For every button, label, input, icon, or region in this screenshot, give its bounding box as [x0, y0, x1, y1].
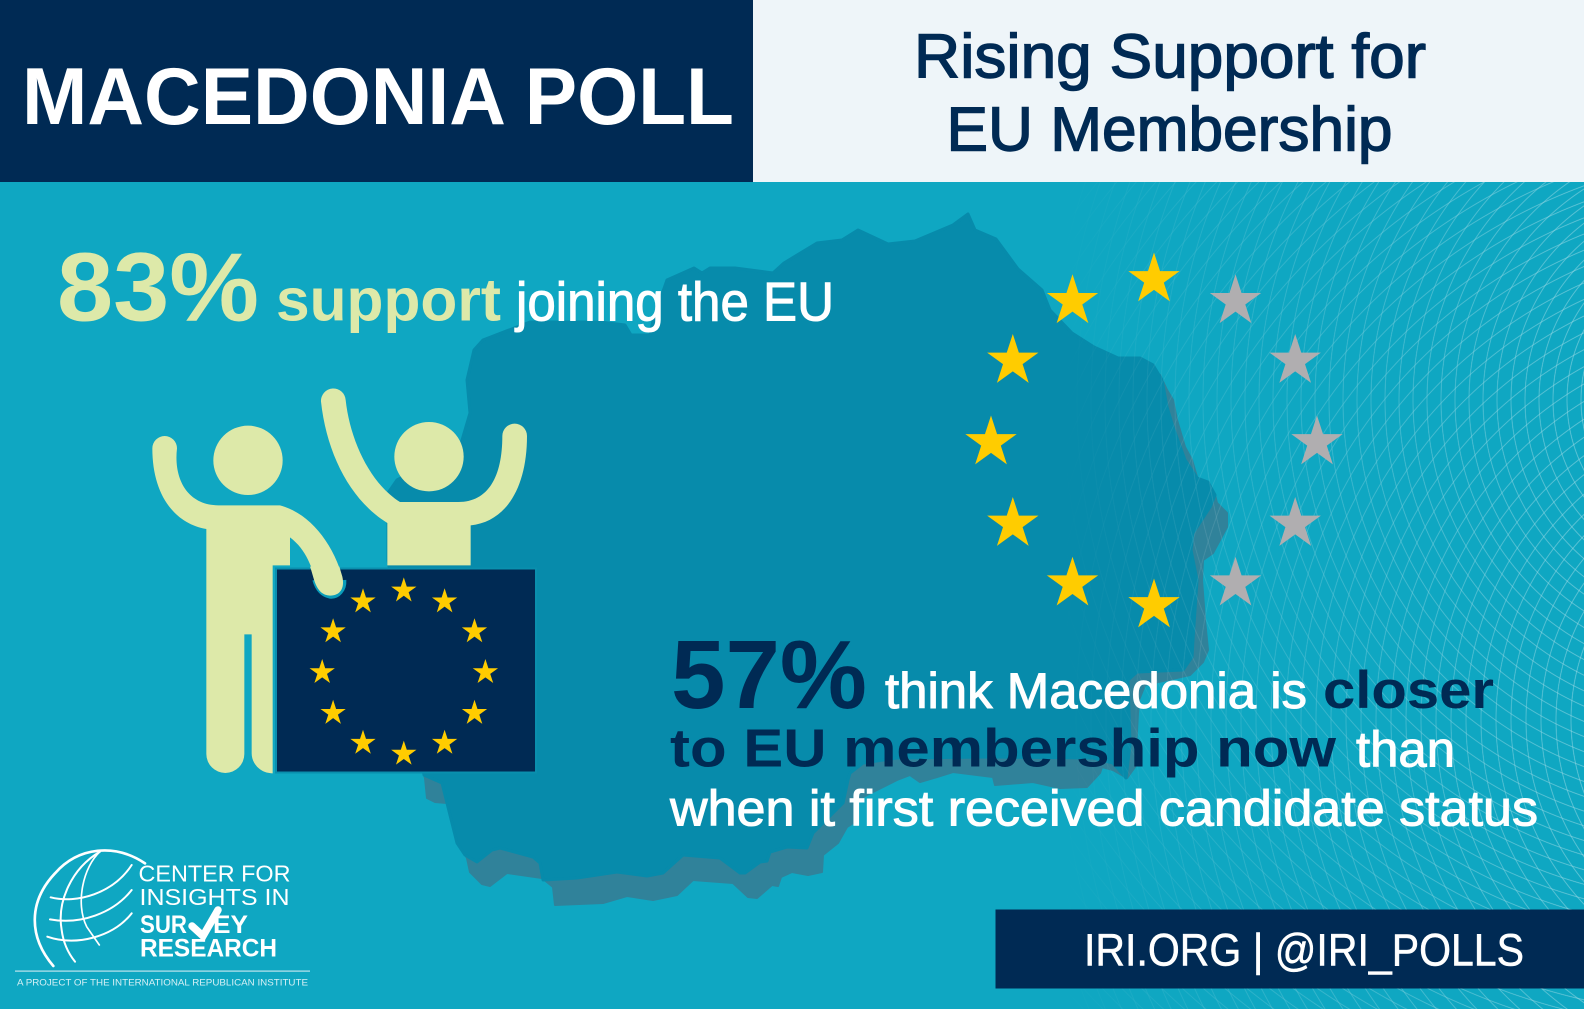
header left panel — [0, 0, 753, 182]
subtitle: Rising Support for — [914, 22, 1426, 92]
logo: Center for Insights in Survey Research: A PROJECT OF THE INTERNATIONAL REPUBLICAN INSTITUTE — [17, 978, 308, 988]
headline: 83% support joining the EU: joining the EU — [514, 270, 834, 332]
person right — [321, 388, 527, 565]
map of Macedonia — [388, 214, 1215, 880]
icon: check mark — [192, 910, 218, 936]
footer band — [996, 910, 1584, 988]
logo: Center for Insights in Survey Research: INSIGHTS IN — [140, 884, 290, 910]
person left — [152, 426, 343, 773]
header right panel — [753, 0, 1584, 182]
statement: 57% think Macedonia is closer: think Macedonia is — [885, 663, 1307, 719]
map of Macedonia shadow — [424, 375, 1227, 905]
flag stars — [310, 577, 498, 765]
icon: globe — [35, 850, 145, 966]
statement: 57% think Macedonia is closer: 57% — [671, 620, 867, 729]
hand over flag — [310, 567, 344, 597]
main title: MACEDONIA POLL — [22, 52, 734, 142]
logo: Center for Insights in Survey Research: SUR — [140, 911, 187, 939]
statement: 57% think Macedonia is closer: than — [1356, 722, 1455, 778]
subtitle: EU Membership — [946, 96, 1392, 164]
headline: 83% support joining the EU: 83% — [57, 232, 259, 342]
headline: 83% support joining the EU: support — [276, 266, 501, 334]
statement: 57% think Macedonia is closer: to EU membership now — [670, 718, 1337, 778]
logo: Center for Insights in Survey Research: CENTER FOR — [138, 860, 290, 886]
moire line pattern, right side — [1094, 182, 1584, 1009]
logo: Center for Insights in Survey Research — [15, 850, 310, 988]
headline: 83% support joining the EU — [57, 232, 834, 342]
logo: Center for Insights in Survey Research: RESEARCH — [140, 934, 277, 962]
EU flag panel — [276, 568, 536, 772]
statement: 57% think Macedonia is closer — [669, 620, 1538, 836]
footer text: IRI.ORG | @IRI_POLLS — [1084, 924, 1524, 976]
statement: 57% think Macedonia is closer: when it first received candidate status — [669, 780, 1538, 836]
statement: 57% think Macedonia is closer: closer — [1323, 661, 1494, 720]
logo: Center for Insights in Survey Research: EY — [213, 911, 248, 939]
star ring: 7 yellow, 5 grey — [965, 252, 1343, 627]
icon: two people holding EU flag — [152, 388, 536, 773]
subtitle — [914, 22, 1426, 164]
